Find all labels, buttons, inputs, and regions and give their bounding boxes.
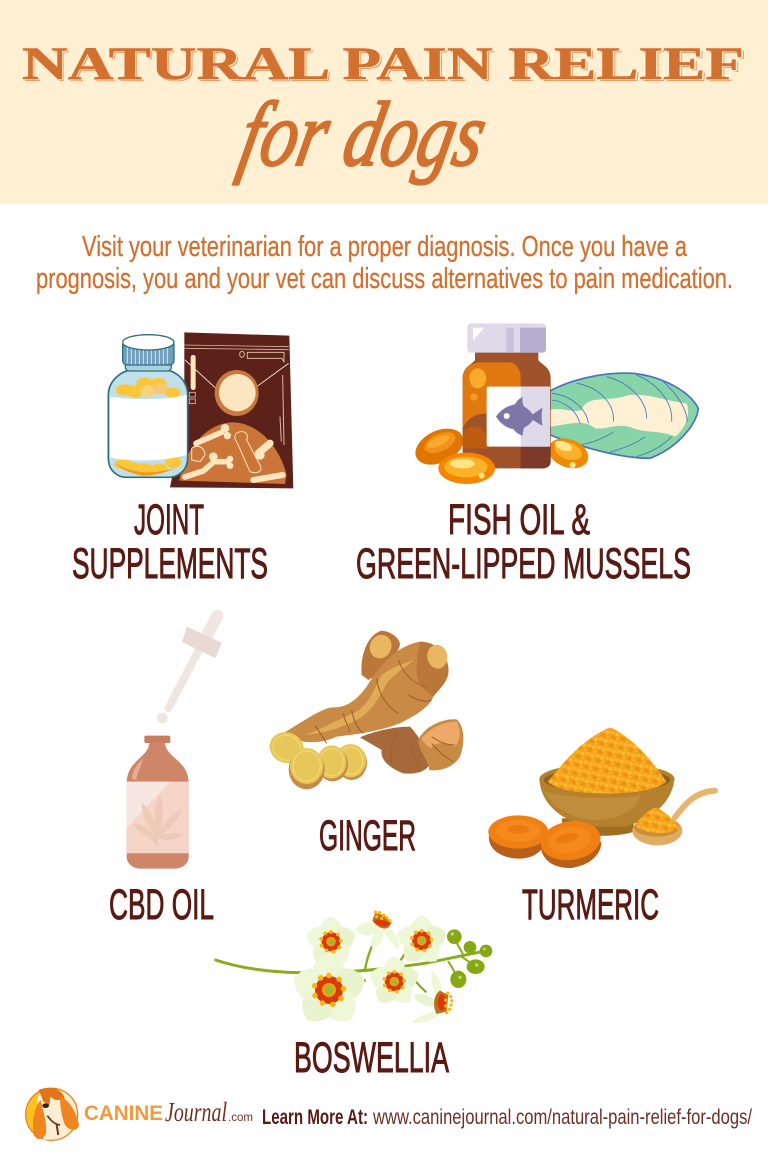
- intro text: [36, 231, 733, 295]
- label: boswellia: BOSWELLIA: [294, 1034, 449, 1082]
- subtitle: for dogs: for dogs: [232, 84, 495, 186]
- icon: turmeric bowl, spoon and slices: [488, 727, 715, 868]
- icon: fish oil bottle and green-lipped mussel: [410, 323, 698, 484]
- logo wordmark: .com: [228, 1110, 253, 1124]
- label: turmeric: TURMERIC: [522, 881, 659, 929]
- label: joint supplements: [72, 496, 268, 588]
- title: NATURAL PAIN RELIEF: [22, 38, 744, 90]
- title: NATURAL PAIN RELIEF: [23, 39, 746, 91]
- title: NATURAL PAIN RELIEF: [24, 40, 747, 92]
- label: fish oil and green-lipped mussels: [356, 496, 691, 588]
- icon: joint supplements bottle and treat bag: [108, 332, 293, 488]
- footer link text: Learn More At:: [262, 1106, 368, 1129]
- logo wordmark: [84, 1097, 253, 1127]
- icon: canine journal dog logo: [26, 1088, 79, 1140]
- logo wordmark: CANINE: [84, 1102, 163, 1125]
- icon: boswellia flowering branch: [216, 910, 492, 1029]
- label: ginger: GINGER: [319, 812, 416, 860]
- label: fish oil and green-lipped mussels: FISH OIL &: [448, 496, 590, 544]
- label: cbd oil: CBD OIL: [109, 881, 214, 929]
- icon: cbd oil bottle and dropper: [127, 616, 221, 869]
- label: joint supplements: SUPPLEMENTS: [72, 540, 268, 588]
- logo wordmark: Journal: [165, 1097, 227, 1127]
- label: joint supplements: JOINT: [134, 496, 204, 544]
- icon: ginger root: [265, 631, 463, 789]
- header band: [0, 0, 768, 204]
